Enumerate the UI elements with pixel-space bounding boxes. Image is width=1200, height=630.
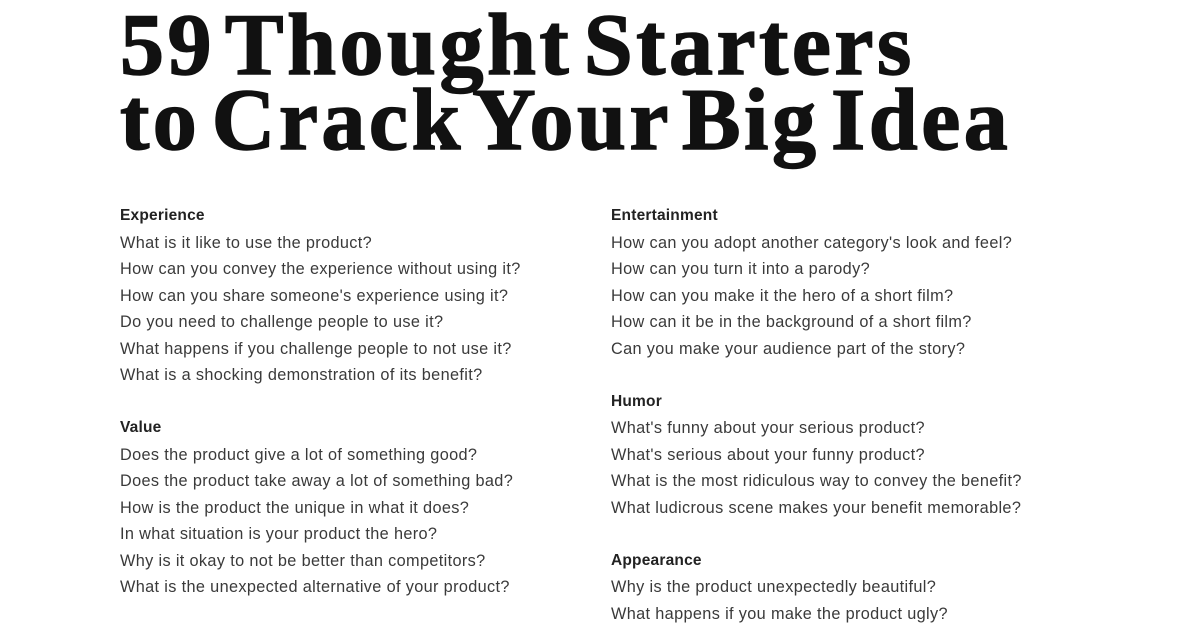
section: Value: In what situation is your product the hero? [120, 525, 437, 543]
section: Value: How is the product the unique in what it does? [120, 498, 469, 516]
section: Entertainment: How can you turn it into a parody? [611, 260, 870, 278]
section: Entertainment: How can it be in the background of a short film? [611, 313, 972, 331]
section: Entertainment: How can you make it the hero of a short film? [611, 286, 953, 304]
section: Appearance [611, 552, 948, 622]
section: Experience: What is a shocking demonstration of its benefit? [120, 366, 483, 384]
section: Experience: What happens if you challenge people to not use it? [120, 340, 512, 358]
section: Humor: What's serious about your funny product? [611, 446, 925, 464]
section: Value: Why is it okay to not be better than competitors? [120, 552, 486, 570]
section: Humor: What's funny about your serious product? [611, 419, 925, 437]
right column [611, 207, 1022, 622]
section: Appearance: Why is the product unexpectedly beautiful? [611, 578, 936, 596]
section: Humor: What ludicrous scene makes your benefit memorable? [611, 498, 1021, 516]
section: Experience: What is it like to use the product? [120, 234, 372, 252]
section: Appearance: What happens if you make the product ugly? [611, 604, 948, 622]
title: to Crack Your Big Idea [120, 72, 1011, 169]
section: Value: Does the product take away a lot of something bad? [120, 472, 513, 490]
section: Value: Does the product give a lot of something good? [120, 446, 477, 464]
section: Value [120, 419, 513, 596]
section: Value: Value [120, 419, 162, 436]
section: Entertainment: Can you make your audience part of the story? [611, 340, 965, 358]
section: Appearance: Appearance [611, 552, 702, 568]
section: Value: What is the unexpected alternative of your product? [120, 578, 510, 596]
section: Experience [120, 207, 521, 384]
section: Humor: What is the most ridiculous way to convey the benefit? [611, 472, 1022, 490]
section: Entertainment: How can you adopt another category's look and feel? [611, 234, 1012, 252]
section: Humor: Humor [611, 392, 662, 410]
section: Entertainment [611, 207, 1012, 358]
title [120, 0, 1011, 170]
section: Experience: Do you need to challenge people to use it? [120, 313, 443, 331]
section: Experience: How can you convey the experience without using it? [120, 260, 521, 278]
left column [120, 207, 521, 596]
section: Experience: Experience [120, 207, 205, 224]
section: Entertainment: Entertainment [611, 207, 718, 224]
section: Experience: How can you share someone's experience using it? [120, 286, 508, 304]
section: Humor [611, 392, 1022, 516]
